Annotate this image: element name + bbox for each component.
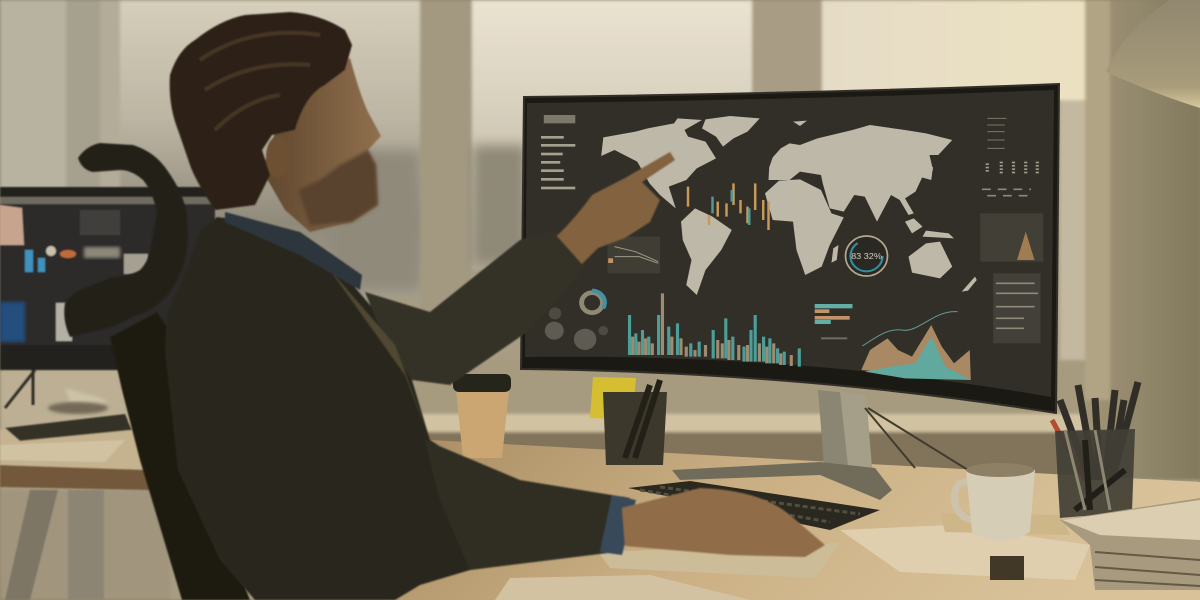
hair highlights <box>200 33 320 130</box>
pen holder <box>603 380 667 465</box>
candlestick overlay <box>688 183 768 230</box>
paper stack <box>1060 498 1200 590</box>
person <box>165 12 825 600</box>
left desk <box>0 414 150 600</box>
beard <box>298 150 378 226</box>
left keyboard <box>5 414 132 441</box>
white mug <box>954 463 1035 541</box>
desk lamp <box>1106 0 1200 108</box>
neck and face <box>262 58 381 232</box>
blue cuff <box>600 495 636 555</box>
area chart <box>861 312 971 380</box>
jacket body <box>165 217 625 600</box>
bar chart <box>630 293 799 367</box>
horizontal bars <box>815 304 852 339</box>
hair <box>170 12 352 210</box>
small line chart panel <box>608 237 660 273</box>
chair headrest arc <box>64 143 188 337</box>
chair back <box>110 312 250 600</box>
window sill <box>415 360 1085 430</box>
notebook under hand <box>598 543 840 578</box>
shirt collar <box>225 212 362 290</box>
paper on left desk <box>0 440 125 462</box>
hand on mouse <box>622 488 825 557</box>
left background monitor <box>0 187 215 414</box>
gauge: 83 32%: 83 32% <box>851 251 882 261</box>
left wall lower <box>0 370 170 440</box>
world map <box>601 116 977 295</box>
monitor content <box>541 115 1043 380</box>
donut chart <box>545 291 608 350</box>
right panels <box>980 118 1043 343</box>
ear <box>266 136 290 178</box>
left desk objects <box>65 388 108 408</box>
desk papers <box>495 513 1090 600</box>
main curved monitor <box>521 84 1059 413</box>
coffee cup <box>453 374 511 458</box>
pointing hand <box>557 152 675 264</box>
left list panel <box>541 115 575 189</box>
desk top <box>390 440 1200 600</box>
gauge: 83 32% <box>846 236 888 276</box>
forearm to mouse <box>425 440 630 570</box>
keyboard <box>628 481 880 530</box>
office chair <box>64 143 250 600</box>
monitor stand <box>672 390 968 500</box>
right pen holder <box>1052 382 1138 518</box>
yellow sticky note <box>590 377 636 420</box>
raised sleeve <box>365 230 585 385</box>
lapel highlight <box>330 270 430 440</box>
